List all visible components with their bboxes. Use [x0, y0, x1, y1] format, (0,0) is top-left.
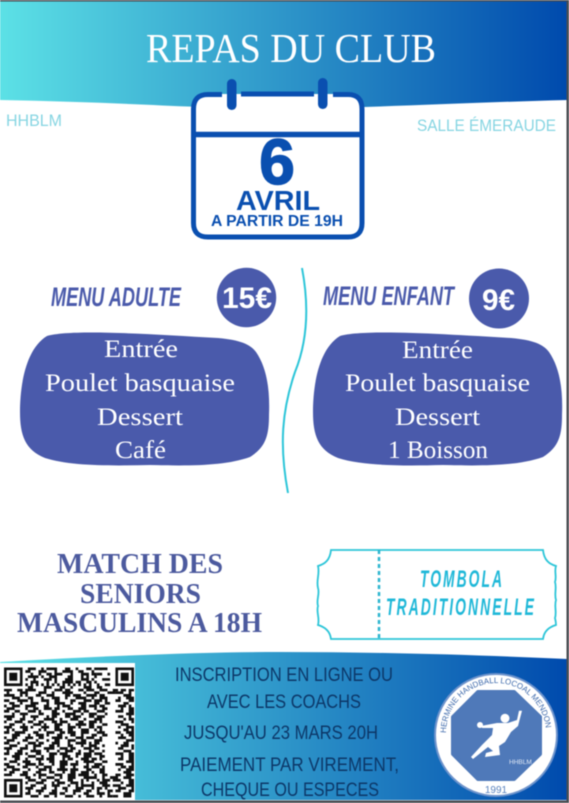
- icon: calendar with date: A PARTIR DE 19H: [211, 213, 343, 230]
- price badge: 15 euros: [217, 268, 276, 327]
- registration information: JUSQU'AU 23 MARS 20H: [184, 723, 378, 744]
- match announcement: [17, 548, 262, 639]
- registration information: [175, 665, 399, 801]
- price badge: 9 euros: [469, 268, 529, 328]
- founding year: 1991: [485, 785, 508, 796]
- footer band: [0, 652, 567, 800]
- icon: handball player: [471, 711, 522, 759]
- match announcement: MASCULINS A 18H: [17, 607, 262, 639]
- menu list blob: [20, 332, 269, 465]
- price badge: 15 euros: 15€: [222, 282, 272, 315]
- icon: calendar with date: 6: [259, 126, 295, 198]
- title: REPAS DU CLUB: [146, 25, 436, 71]
- registration information: INSCRIPTION EN LIGNE OU: [175, 665, 393, 686]
- registration information: AVEC LES COACHS: [207, 692, 361, 713]
- tombola ticket: TOMBOLA: [420, 566, 504, 593]
- tombola ticket: [317, 550, 556, 640]
- price badge: 9 euros: 9€: [482, 284, 515, 317]
- club initials: HHBLM: [509, 759, 532, 766]
- heading: menu enfant: MENU ENFANT: [323, 281, 456, 311]
- icon: calendar with date: [194, 78, 362, 238]
- QR right-hand modules: [97, 669, 134, 796]
- menu list blob: Café: [115, 437, 166, 464]
- organiser label: HHBLM: [6, 111, 62, 130]
- menu list blob: Entrée: [402, 337, 473, 364]
- menu list blob: Poulet basquaise: [345, 370, 530, 397]
- heading: menu adulte: MENU ADULTE: [51, 282, 182, 312]
- menu list blob: Entrée: [104, 336, 178, 363]
- icon: calendar with date: AVRIL: [236, 185, 320, 216]
- panel: adult menu: [20, 268, 276, 465]
- menu list blob: Dessert: [97, 404, 183, 431]
- panel: child menu: [313, 268, 562, 465]
- match announcement: SENIORS: [80, 578, 201, 610]
- curved club name: HERMINE HANDBALL LOCOAL MENDON: [440, 677, 552, 734]
- menu list blob: Poulet basquaise: [45, 370, 235, 397]
- menu list blob: [313, 332, 562, 465]
- venue label: SALLE ÉMERAUDE: [417, 116, 556, 135]
- menu list blob: Dessert: [395, 404, 480, 431]
- QR code: [0, 663, 135, 800]
- registration information: PAIEMENT PAR VIREMENT,: [180, 755, 399, 776]
- match announcement: MATCH DES: [57, 548, 223, 580]
- club logo: [434, 672, 559, 798]
- header band: [0, 0, 567, 109]
- divider curve: [283, 268, 306, 493]
- menu list blob: 1 Boisson: [388, 437, 488, 464]
- registration information: CHEQUE OU ESPECES: [201, 780, 379, 801]
